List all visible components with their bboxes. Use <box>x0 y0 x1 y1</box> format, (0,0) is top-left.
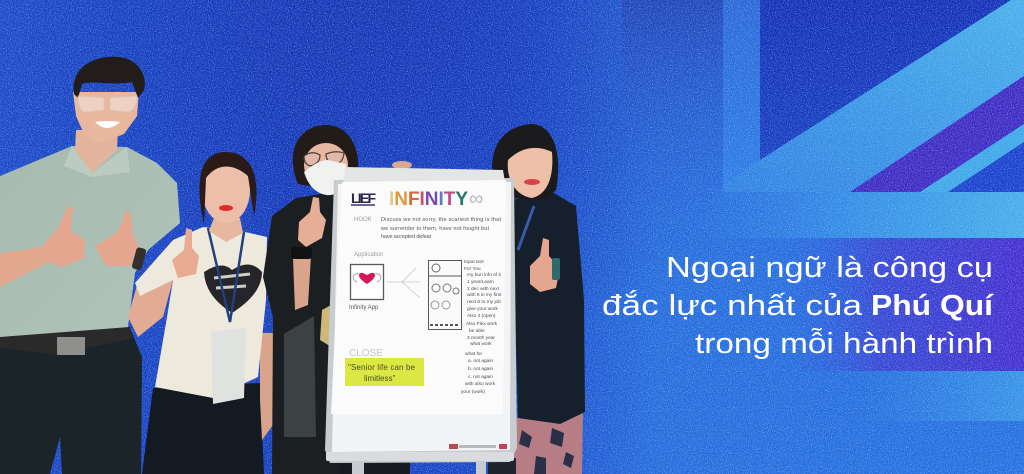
watch <box>291 247 312 259</box>
title INFINITY with colored letters: INFINITY <box>389 189 468 210</box>
hair <box>492 124 558 200</box>
badge at waist <box>320 304 333 348</box>
hook handwriting <box>380 217 501 240</box>
person: man in sage shirt <box>0 57 180 474</box>
thumb up left <box>43 206 85 267</box>
T-shirt <box>135 227 267 398</box>
right column handwritten notes: 3 month year <box>467 335 495 341</box>
forearm left <box>0 247 47 287</box>
right column handwritten notes: next 6 to my job <box>467 299 501 305</box>
person: woman in black cardigan and mask <box>263 125 410 474</box>
right column handwritten notes: c. not again <box>468 374 493 380</box>
right column handwritten notes: b. not again <box>468 366 493 372</box>
glasses <box>304 152 344 166</box>
line 2 regular: đắc lực nhất của <box>602 289 863 322</box>
headline text <box>602 252 994 360</box>
right column handwritten notes: a. not again <box>468 358 493 364</box>
right column handwritten notes: be able <box>469 328 485 334</box>
hair <box>74 57 145 98</box>
hook handwriting: have accepted defeat <box>381 234 431 240</box>
thumb up <box>298 197 326 247</box>
hair <box>293 125 358 190</box>
person: woman in navy blazer <box>392 124 585 474</box>
bracelet <box>552 258 560 280</box>
mask <box>304 160 346 195</box>
HOOK section: HOOK <box>354 217 372 223</box>
dark under board <box>488 458 516 474</box>
line 2 bold brand: Phú Quí <box>871 290 994 322</box>
hook handwriting: Discuss we not sorry, the scariest thing is that <box>381 217 501 223</box>
thumb up <box>530 238 560 292</box>
neck <box>75 130 118 173</box>
floral dress <box>514 412 583 474</box>
thumb up <box>172 228 199 278</box>
forearm <box>293 256 311 310</box>
blazer <box>512 192 585 424</box>
right column handwritten notes: what for <box>465 351 482 357</box>
cardigan <box>263 190 345 474</box>
right column handwritten notes: Input text <box>464 259 484 265</box>
hand on chart top <box>392 161 412 169</box>
trousers <box>0 328 142 474</box>
hook handwriting: we surrender to them, have not fought but <box>380 226 489 232</box>
right column handwritten notes: Also Flex work <box>466 321 498 327</box>
board tray <box>326 452 514 461</box>
infinity app icon with heart <box>350 264 384 300</box>
application label: Application <box>354 252 383 258</box>
background: Union Jack flag shapes <box>622 0 1024 421</box>
phone wireframe <box>428 260 462 330</box>
person: woman in white T-shirt with lanyard <box>128 152 273 474</box>
smile <box>95 121 120 128</box>
face <box>202 157 250 223</box>
stand legs <box>352 458 364 474</box>
hair <box>199 152 256 224</box>
flipchart on stand <box>325 167 517 474</box>
thumb up right <box>95 210 140 266</box>
logo LIEF: LIEF <box>351 190 376 206</box>
right column handwritten notes: your (work) <box>461 389 485 395</box>
collar <box>64 146 130 177</box>
glasses <box>78 96 137 112</box>
board surface <box>332 182 511 452</box>
watch <box>131 247 147 271</box>
right column handwritten notes: what work <box>470 341 492 347</box>
lanyard <box>208 228 244 322</box>
close section label: CLOSE <box>349 348 383 359</box>
face <box>73 92 139 143</box>
right column handwritten notes: my bun info of it <box>467 272 502 278</box>
connector lines <box>386 268 420 298</box>
background: darker top zone <box>0 0 800 400</box>
paper sheet <box>331 180 506 414</box>
app name: Infinity App <box>349 305 379 311</box>
right column handwritten notes: Also 4 (open) <box>467 313 496 319</box>
lips <box>524 179 540 185</box>
shirt <box>0 146 180 342</box>
lower dress behind flipchart <box>340 455 410 474</box>
face <box>508 148 552 198</box>
yellow sticky note: "Senior life can be <box>348 363 416 372</box>
trousers <box>142 383 264 474</box>
line 3: trong mỗi hành trình <box>695 327 993 360</box>
lanyard <box>518 206 534 250</box>
face <box>304 143 348 187</box>
right column handwritten notes: with 6 in my first <box>467 292 502 298</box>
right column handwritten notes: give your work <box>467 306 499 312</box>
logo underline <box>351 204 375 206</box>
yellow sticky note <box>345 358 424 386</box>
board frame <box>325 178 517 463</box>
grey scarf <box>284 316 316 437</box>
right column handwritten notes: 2 dec with next <box>467 286 500 292</box>
line 1: Ngoại ngữ là công cụ <box>666 252 993 284</box>
neck <box>209 218 243 242</box>
logos at bottom of board <box>449 444 507 449</box>
right column handwritten notes: with also work <box>465 381 496 387</box>
arm <box>128 280 173 337</box>
right column handwritten notes: For You <box>464 266 481 272</box>
lips <box>219 205 233 211</box>
heart print <box>204 264 262 313</box>
infinity symbol: ∞ <box>469 188 483 210</box>
yellow sticky note: limitless" <box>364 374 395 383</box>
badge <box>211 328 246 404</box>
right column handwritten notes <box>461 259 502 395</box>
right column handwritten notes: 1 year/Learn <box>467 279 494 285</box>
rolled paper at top <box>344 167 505 184</box>
lower right arm <box>260 333 273 440</box>
belt <box>0 327 133 355</box>
